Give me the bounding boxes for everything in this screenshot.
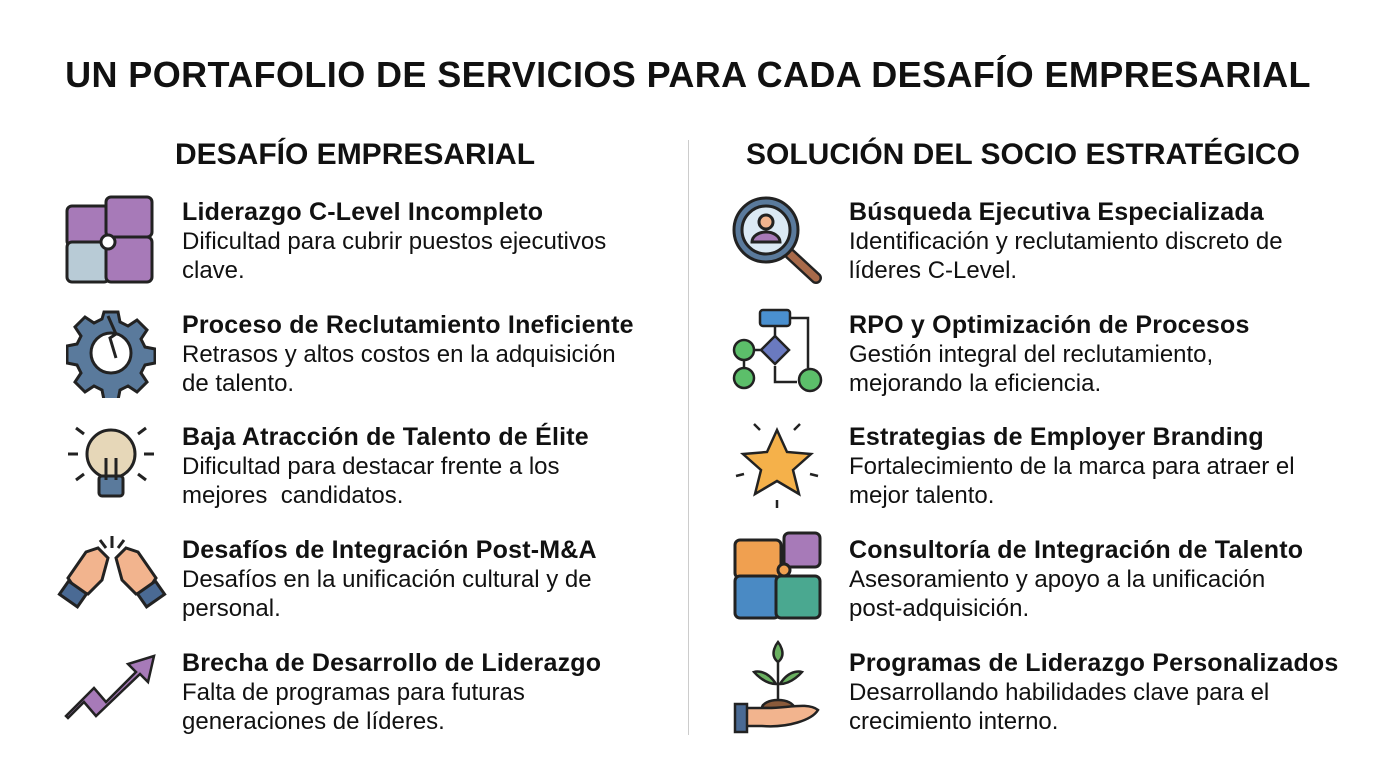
- item: Brecha: Brecha de Desarrollo de Liderazgo: [182, 649, 601, 677]
- item: Employer Branding: [849, 423, 1295, 509]
- item: Consultoría: Asesoramiento y apoyo a la unificación post-adquisición.: [849, 566, 1265, 622]
- item: Programas: [849, 649, 1338, 735]
- item: Liderazgo: Dificultad para cubrir puestos ejecutivos clave.: [182, 228, 606, 284]
- item: Programas: Desarrollando habilidades clave para el crecimiento interno.: [849, 679, 1269, 735]
- item: Liderazgo: [182, 198, 606, 284]
- item: Proceso: Proceso de Reclutamiento Ineficiente: [182, 311, 634, 339]
- icon: magnifier: [732, 196, 822, 284]
- item: Integración: Desafíos en la unificación cultural y de personal.: [182, 566, 592, 622]
- icon: flowchart: [732, 308, 822, 392]
- icon: star: [736, 423, 818, 508]
- item: Integración: Desafíos de Integración Post-M&A: [182, 536, 597, 564]
- title: UN PORTAFOLIO DE SERVICIOS PARA CADA DESAFÍO EMPRESARIAL: [65, 54, 1311, 95]
- icon: hand with plant: [734, 640, 820, 734]
- item: Baja Atracción: Baja Atracción de Talento de Élite: [182, 423, 589, 451]
- item: Brecha: [182, 649, 601, 735]
- icon: colored puzzle: [734, 532, 822, 620]
- icon: broken gear: [66, 310, 156, 398]
- icon: puzzle purple: [66, 196, 154, 284]
- column heading: solution: SOLUCIÓN DEL SOCIO ESTRATÉGICO: [746, 138, 1300, 171]
- item: Proceso: Retrasos y altos costos en la adquisición de talento.: [182, 341, 616, 397]
- item: Consultoría: Consultoría de Integración de Talento: [849, 536, 1303, 564]
- item: RPO: Gestión integral del reclutamiento, mejorando la eficiencia.: [849, 341, 1213, 397]
- column heading: challenge: DESAFÍO EMPRESARIAL: [175, 138, 535, 171]
- item: Employer Branding: Estrategias de Employer Branding: [849, 423, 1264, 451]
- item: Baja Atracción: Dificultad para destacar frente a los mejores candidatos.: [182, 453, 560, 509]
- item: Integración: [182, 536, 597, 622]
- item: Búsqueda: Identificación y reclutamiento discreto de líderes C-Level.: [849, 228, 1283, 284]
- item: Proceso: [182, 311, 634, 397]
- item: RPO: [849, 311, 1250, 397]
- item: Employer Branding: Fortalecimiento de la marca para atraer el mejor talento.: [849, 453, 1295, 509]
- icon: light bulb: [68, 426, 154, 498]
- icon: rising arrow: [64, 654, 156, 720]
- item: Baja Atracción: [182, 422, 589, 509]
- item: Búsqueda: [849, 198, 1283, 284]
- item: Búsqueda: Búsqueda Ejecutiva Especializada: [849, 198, 1264, 226]
- item: Liderazgo: Liderazgo C-Level Incompleto: [182, 198, 543, 226]
- item: Consultoría: [849, 536, 1303, 622]
- item: RPO: RPO y Optimización de Procesos: [849, 311, 1250, 339]
- item: Brecha: Falta de programas para futuras generaciones de líderes.: [182, 679, 525, 735]
- item: Programas: Programas de Liderazgo Personalizados: [849, 649, 1338, 677]
- icon: hands: [57, 536, 167, 609]
